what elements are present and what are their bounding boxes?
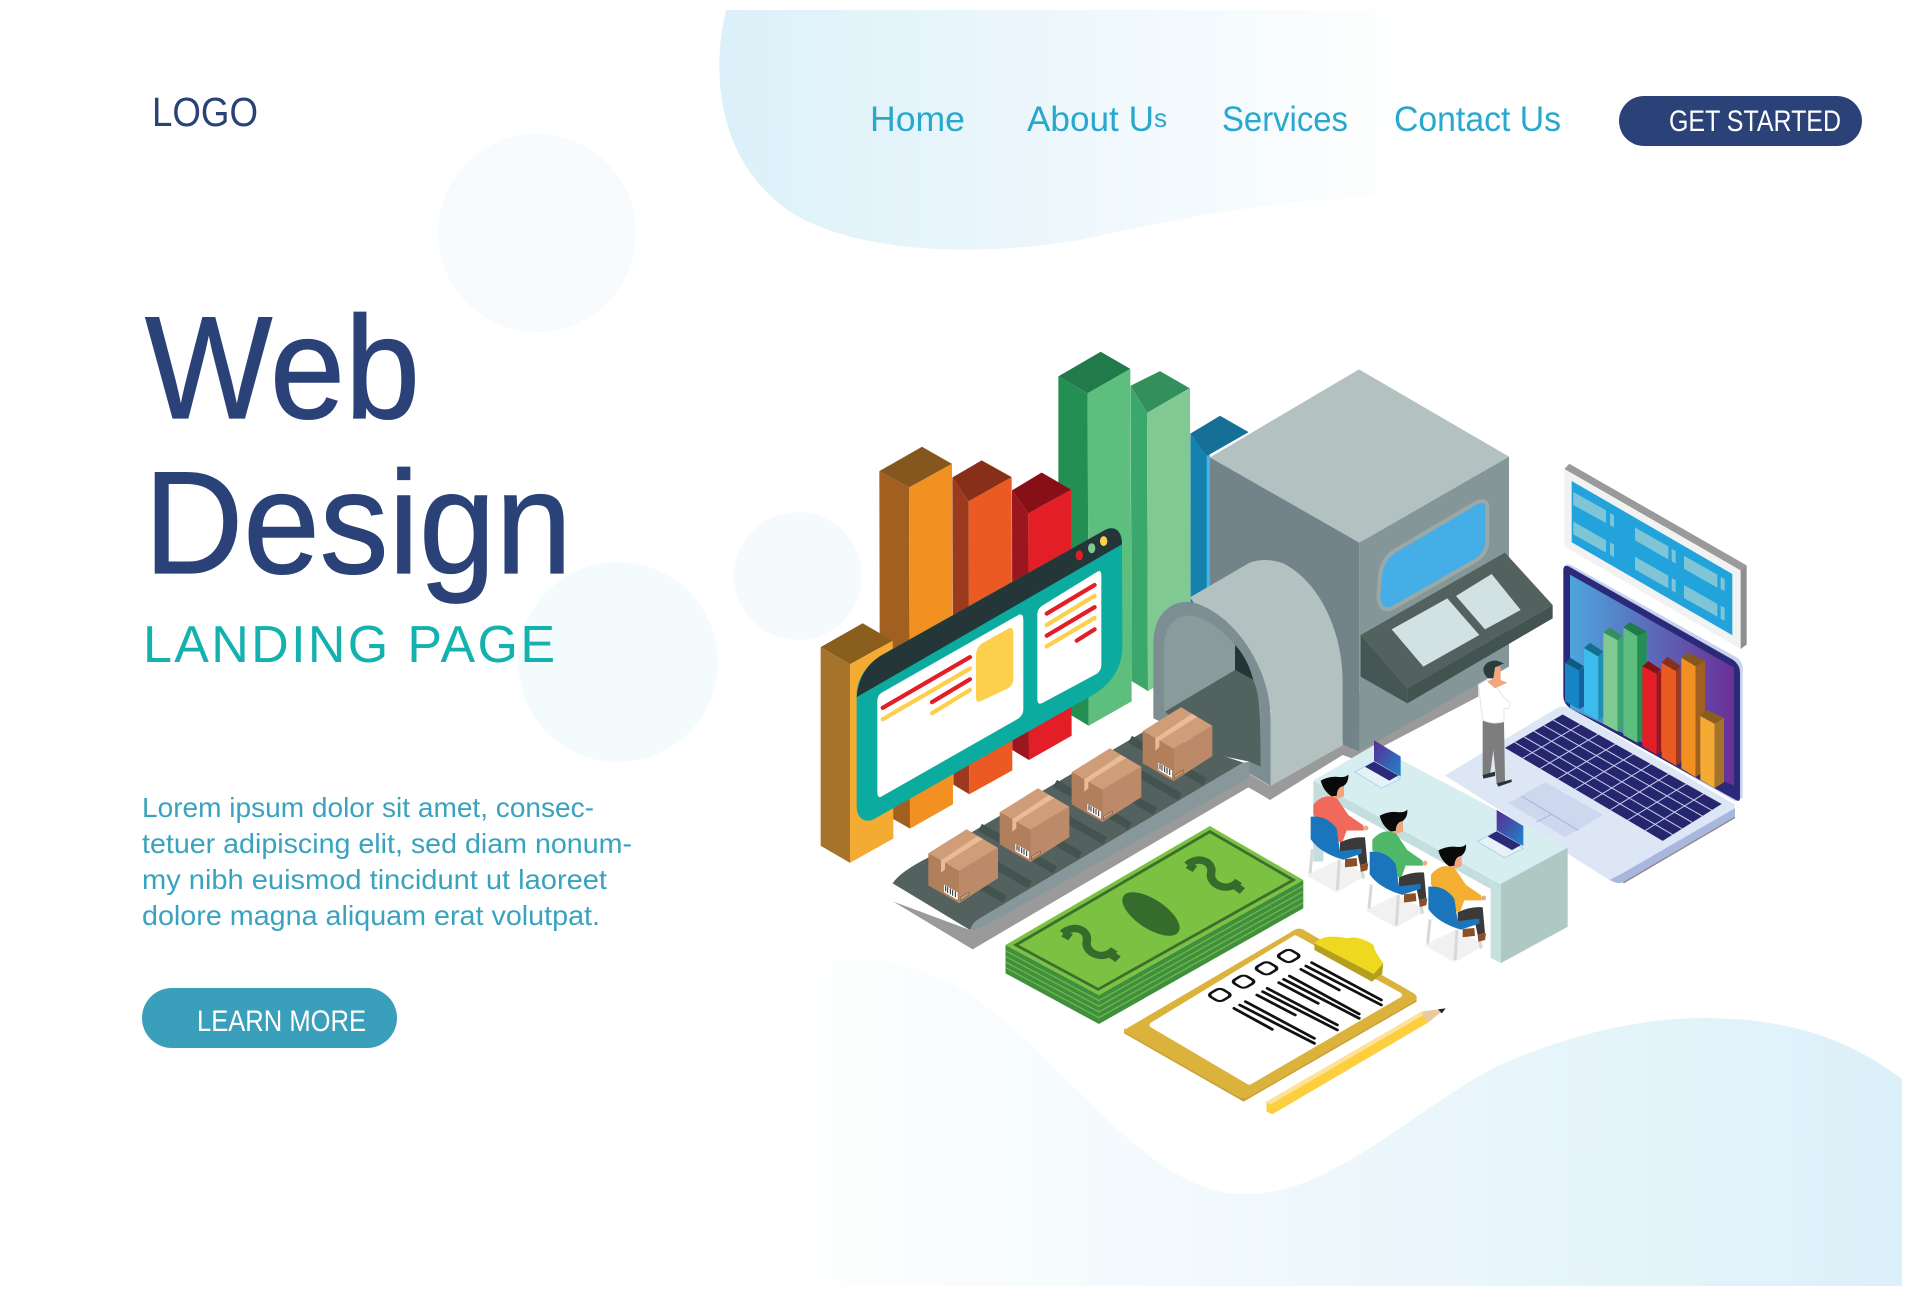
small laptops bbox=[1355, 740, 1523, 858]
column: blue bbox=[1190, 416, 1249, 636]
body paragraph bbox=[142, 792, 632, 931]
background circles bbox=[438, 134, 862, 762]
person: yellow shirt bbox=[1424, 844, 1486, 962]
pencil bbox=[1267, 1008, 1446, 1114]
clipboard clip bbox=[1314, 943, 1383, 982]
get started button: GET STARTED bbox=[1669, 105, 1841, 138]
bar chart: 3D columns bbox=[821, 352, 1249, 863]
get started button bbox=[1619, 96, 1862, 146]
browser window panel bbox=[857, 528, 1122, 821]
desk with team bbox=[1307, 740, 1568, 963]
subtitle: LANDING PAGE bbox=[143, 616, 555, 674]
laptop screen bar chart bbox=[1565, 622, 1724, 788]
conveyor belt bbox=[893, 730, 1271, 949]
machine body bbox=[1210, 369, 1509, 752]
laptop keyboard bbox=[1505, 714, 1722, 841]
title line: design: Design bbox=[144, 441, 572, 604]
body paragraph: my nibh euismod tincidunt ut laoreet bbox=[142, 864, 607, 895]
isometric illustration bbox=[821, 352, 1747, 1114]
tunnel arch bbox=[1153, 560, 1359, 786]
nav: home: Home bbox=[870, 100, 965, 139]
nav: about us: s bbox=[1154, 103, 1167, 133]
desk bbox=[1313, 745, 1568, 963]
cardboard boxes bbox=[928, 707, 1212, 903]
standing man bbox=[1478, 661, 1512, 787]
machine console bbox=[1361, 553, 1553, 703]
title bbox=[144, 286, 572, 604]
logo: LOGO bbox=[152, 89, 258, 135]
machine base shadow bbox=[1249, 680, 1478, 800]
column: orange bbox=[879, 447, 953, 829]
column: yellow bbox=[821, 623, 893, 863]
title line: web: Web bbox=[145, 286, 420, 449]
body paragraph: tetuer adipiscing elit, sed diam nonum- bbox=[142, 828, 632, 859]
laptop base bbox=[1445, 707, 1735, 883]
nav: services: Services bbox=[1222, 100, 1348, 139]
navigation bbox=[870, 100, 1561, 139]
background blob: bottom bbox=[760, 960, 1902, 1286]
background blob: top bbox=[719, 10, 1480, 250]
learn more button bbox=[142, 988, 397, 1048]
column: green bbox=[1058, 352, 1132, 726]
clipboard bbox=[1124, 929, 1417, 1102]
person: red shirt bbox=[1307, 774, 1368, 892]
machine window bbox=[1378, 501, 1487, 609]
machine bbox=[1153, 369, 1553, 800]
banknote stack bbox=[1006, 826, 1303, 1024]
column: light green bbox=[1131, 371, 1191, 691]
laptop screen bbox=[1563, 564, 1743, 801]
body paragraph: dolore magna aliquam erat volutpat. bbox=[142, 900, 600, 931]
wall monitor panel bbox=[1564, 464, 1747, 649]
laptop bbox=[1445, 564, 1743, 883]
learn more button: LEARN MORE bbox=[197, 1005, 366, 1038]
column: orange-red bbox=[952, 460, 1012, 794]
nav: about us: About U bbox=[1027, 100, 1154, 139]
person: green shirt bbox=[1366, 810, 1427, 928]
nav: contact us: Contact Us bbox=[1394, 100, 1561, 139]
column: red bbox=[1012, 472, 1072, 760]
body paragraph: Lorem ipsum dolor sit amet, consec- bbox=[142, 792, 594, 823]
laptop trackpad bbox=[1508, 782, 1603, 837]
